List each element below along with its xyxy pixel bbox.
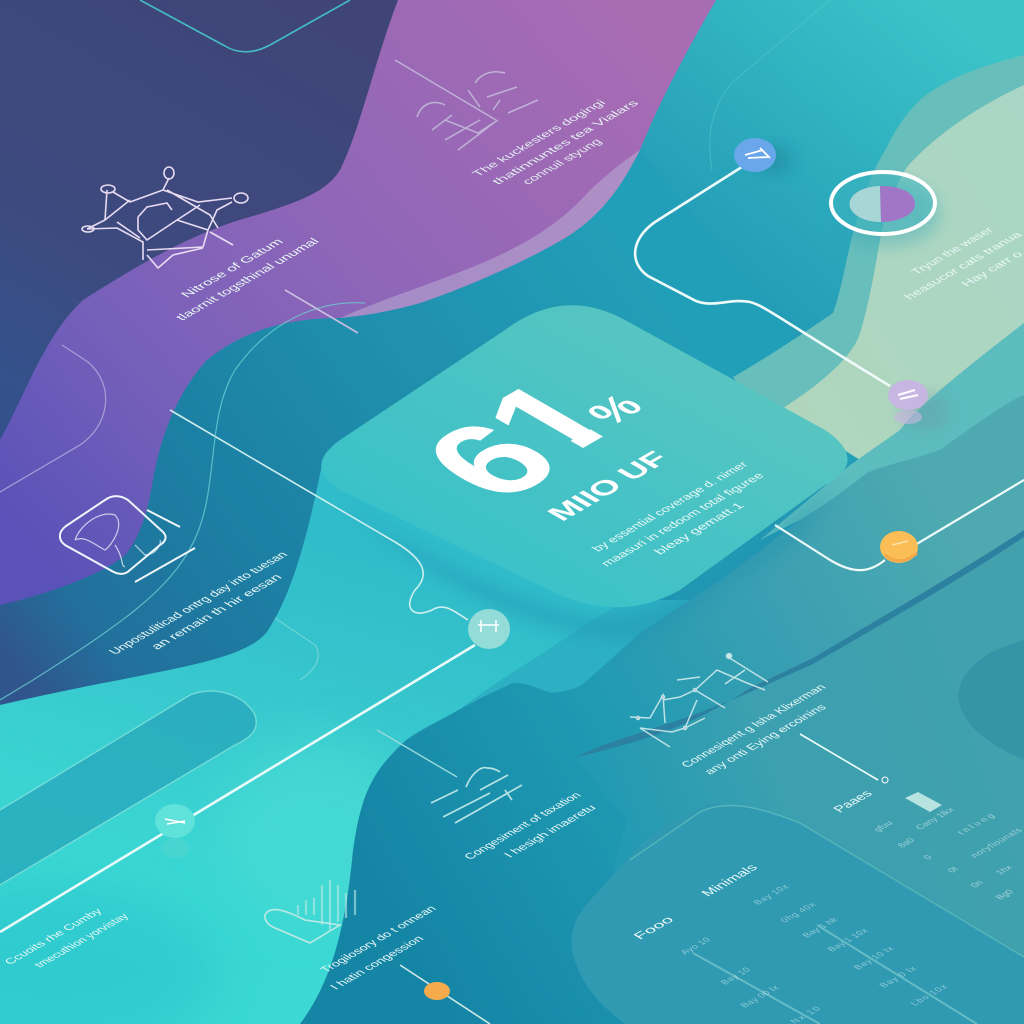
rows: values: Bay 00 lx <box>738 984 782 1009</box>
text: purple panel <box>470 98 642 187</box>
card body text: maasuri in redoom total figuree <box>597 470 768 569</box>
orange connector <box>400 965 490 1024</box>
central shadow under card <box>340 480 840 640</box>
mini bar <box>905 792 942 812</box>
text: bottom left label: tmecuthion yorvistay <box>32 912 132 970</box>
data lines <box>693 925 977 1024</box>
rows: values: Bay 1 10x <box>825 927 871 953</box>
text: star label: tlaornit togsthinal unumal <box>172 236 322 323</box>
row values: tnlung <box>955 812 997 836</box>
rows: values: Bay 0 lx <box>877 965 919 989</box>
text: bottom left label <box>2 907 132 970</box>
panel: navy top-left wave <box>0 0 420 760</box>
short line: 23 icon <box>377 730 457 777</box>
panel: central card <box>321 305 848 607</box>
line with small pin <box>800 734 888 783</box>
rows: values: Ayo 10 <box>678 936 713 956</box>
short line <box>285 290 358 333</box>
text: star label: Nitrose of Gatum <box>177 236 287 300</box>
icon: foot with bars <box>265 880 355 943</box>
rows: values <box>678 883 950 1024</box>
dark ridge stripe <box>575 530 1024 758</box>
soft shade: bottom-left <box>0 880 220 1024</box>
rows: values: Bay 10 lx <box>851 945 897 971</box>
rows: values: 0hg 40x <box>778 901 818 924</box>
row values: 8a0 <box>895 836 917 849</box>
text: left teal label: an remain th hir eesan <box>147 572 285 652</box>
connector: card to glass node <box>170 410 468 620</box>
rows: values: Lbo 10x <box>908 983 950 1007</box>
row values: 0n <box>968 879 985 889</box>
top-right thin outline <box>710 0 830 170</box>
text: purple panel: thatinnuntes tea Vialars <box>490 99 642 187</box>
connector: purple left curve <box>0 345 106 492</box>
heading: Fooo: Fooo <box>630 914 677 942</box>
text: bottom left label: Ccuoits rhe Cumby <box>2 907 106 967</box>
card body text: by essential coverage d. nimer <box>588 459 751 554</box>
connector: blue node to purple node <box>635 165 890 386</box>
stat: 61 percent block <box>436 388 663 521</box>
text: pale green label: heasucor cats tranua <box>902 230 1024 302</box>
text: purple panel: connuil styung <box>520 137 605 187</box>
text: pale green label: Tryun the waser <box>909 226 997 277</box>
icon: purple node <box>888 380 949 430</box>
digit 6: 6 <box>386 400 595 521</box>
rows: values: Bay 10x <box>751 883 791 906</box>
icon: orange node <box>424 982 450 1000</box>
icon: purple panel glyphs <box>395 60 538 150</box>
connector: through yellow node <box>775 480 1024 570</box>
mid teal strip below card <box>440 600 700 725</box>
panel: light teal lower-left field <box>0 465 660 1024</box>
row values: 0t <box>945 865 961 874</box>
icon: network chart <box>630 654 768 747</box>
text: left teal label: Unpostuliticad ontrg day into tuesan <box>105 549 291 657</box>
row values: Bg0 <box>993 888 1016 901</box>
right dark blob <box>958 640 1024 760</box>
icon: network star <box>82 167 248 268</box>
short line: left wave <box>275 618 318 680</box>
rounded band lower-left <box>0 691 256 885</box>
row values: Cany 1lkx <box>913 806 957 831</box>
rows: values: Bay 1 hk <box>800 916 840 939</box>
row values: 0 <box>921 853 934 861</box>
panel: bottom right rounded data card <box>572 804 1024 1024</box>
lavender strip on purple edge <box>340 150 640 318</box>
digit 1: 1 <box>447 361 650 478</box>
text: foot label: Trogilosory do t onnean <box>318 904 439 975</box>
text: foot label: I hatin congession <box>328 934 427 992</box>
icon: teal node <box>155 804 195 858</box>
text: purple panel: The kuckesters dogingi <box>470 98 609 179</box>
percent sign: % <box>577 388 654 432</box>
text: network label: any onti Eying ercoinins <box>702 703 830 777</box>
row values: gfuu <box>871 819 895 833</box>
icon: rounded square with portrait <box>60 496 195 582</box>
row values <box>871 806 1024 901</box>
card body text: bleay gematt.1 <box>650 500 748 557</box>
panel: purple wave <box>0 0 716 605</box>
top-left thin outline <box>140 0 350 52</box>
small table: Paaes: Paaes <box>830 788 876 815</box>
panel: lower right lighter layer <box>575 533 1024 1024</box>
ridge band under card <box>760 323 1024 540</box>
text: network label: Connesiqent g Isha Klixerman <box>679 683 829 770</box>
panel: dark teal wave under purple <box>0 150 880 705</box>
icon: 23 glyphs <box>431 768 522 823</box>
panel: lower right dark field <box>300 395 1024 1024</box>
panel: pale green inner band <box>780 85 1024 460</box>
soft highlight <box>220 740 420 920</box>
text: below 23 glyphs: Congesiment of taxation <box>462 791 584 862</box>
stat label: MIIO UF <box>540 447 675 525</box>
icon: blue node <box>734 138 793 175</box>
text: pale green label: Hay carr o <box>959 250 1024 289</box>
rows: values: Bay 10 <box>718 966 753 986</box>
small table: Paaes <box>830 788 1024 901</box>
row values: 1hx <box>993 864 1015 876</box>
band outline <box>0 691 256 885</box>
text: pale green label <box>902 226 1024 302</box>
panel: pale green outer band <box>733 55 1024 470</box>
connector: glass node to teal node <box>0 645 475 932</box>
icon: glass node <box>468 609 510 649</box>
icon: yellow node <box>880 531 918 563</box>
text: below 23 glyphs: I hesigh imaeretu <box>502 803 599 860</box>
heading: Minimals: Minimals <box>698 862 761 899</box>
icon: pie in ring <box>831 172 940 247</box>
row values: noryfiounals <box>968 826 1024 859</box>
connector: arc line <box>0 303 365 700</box>
